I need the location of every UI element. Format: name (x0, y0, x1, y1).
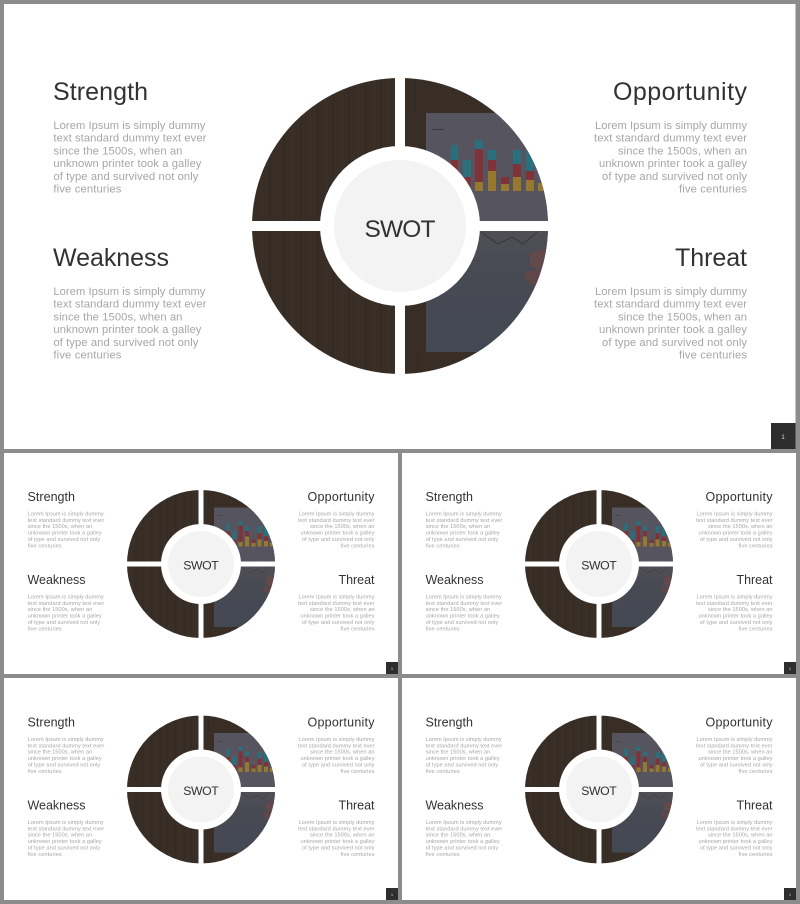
chart: SWOT ring with photo quadrants (522, 486, 676, 641)
label: SWOT centre: SWOT (183, 784, 219, 798)
text block: Threat description: of type and survived not only (700, 620, 773, 626)
text block: Opportunity description: text standard dummy text ever (696, 743, 773, 749)
text block: Threat description: of type and survived not only (602, 337, 747, 349)
text block: Opportunity description: of type and survived not only (700, 762, 773, 768)
text block: Strength description: text standard dummy text ever (426, 743, 502, 749)
text block: Weakness description: unknown printer took a galley (426, 839, 500, 845)
text block: Opportunity description: Lorem Ipsum is simply dummy (696, 737, 773, 743)
text block: Opportunity description: five centuries (340, 769, 375, 775)
text block: Opportunity description: five centuries (340, 543, 375, 549)
text block: Threat description: five centuries (738, 626, 773, 632)
text block: Strength description: five centuries (426, 769, 460, 775)
text block: Weakness description: since the 1500s, when an (426, 607, 490, 613)
text block: Weakness description: Lorem Ipsum is simply dummy (28, 594, 104, 600)
text block: Strength description: text standard dummy text ever (53, 133, 207, 145)
text block: Weakness description: of type and survived not only (426, 620, 498, 626)
text block: Threat description: since the 1500s, when an (310, 607, 374, 613)
label: SWOT centre: SWOT (581, 558, 617, 572)
text block: Weakness description: five centuries (53, 350, 122, 362)
text block: Weakness description: of type and survived not only (28, 620, 100, 626)
panel: small slide bottom left (4, 678, 398, 900)
text block: Opportunity description: of type and survived not only (602, 171, 747, 183)
text block: Opportunity description: since the 1500s, when an (708, 524, 772, 530)
text block: Opportunity description: since the 1500s, when an (618, 145, 747, 157)
text block: Weakness description: of type and survived not only (28, 846, 100, 852)
page number badge: 1 (781, 435, 785, 441)
page number badge: 1 (391, 892, 394, 897)
heading: Opportunity: Opportunity (308, 716, 375, 730)
text block: Weakness description: of type and survived not only (53, 337, 199, 349)
text block: Threat description: unknown printer took a galley (300, 839, 375, 845)
text block: Opportunity description: Lorem Ipsum is simply dummy (595, 120, 747, 132)
text block: Opportunity description: since the 1500s, when an (310, 750, 374, 756)
text block: Threat description: Lorem Ipsum is simply dummy (696, 820, 773, 826)
text block: Threat description: since the 1500s, when an (310, 833, 374, 839)
heading: Opportunity: Opportunity (308, 490, 375, 504)
text block: Weakness description: five centuries (28, 852, 62, 858)
text block: Weakness description: Lorem Ipsum is simply dummy (53, 286, 206, 298)
page number badge (771, 423, 796, 449)
text block: Strength description: unknown printer took a galley (426, 756, 500, 762)
chart: SWOT ring with photo quadrants (124, 486, 278, 641)
heading: Weakness: Weakness (426, 798, 484, 812)
text block: Threat description (594, 286, 747, 362)
text block: Weakness description: five centuries (28, 626, 62, 632)
page number badge (386, 662, 398, 674)
text block: Threat description (298, 820, 375, 858)
text block: Strength description (53, 120, 207, 196)
text block: Strength description: Lorem Ipsum is simply dummy (28, 737, 104, 743)
chart: SWOT ring with photo quadrants (124, 712, 278, 866)
heading: Opportunity: Opportunity (706, 490, 773, 504)
chart: SWOT ring with photo quadrants (245, 70, 555, 380)
text block: Opportunity description: of type and survived not only (700, 537, 773, 543)
text block: Strength description: since the 1500s, when an (426, 750, 490, 756)
text block: Threat description: unknown printer took a galley (599, 324, 747, 336)
label: SWOT centre: SWOT (364, 216, 436, 243)
panel: large SWOT slide (4, 4, 796, 449)
page number badge: 1 (789, 892, 792, 897)
text block: Strength description: Lorem Ipsum is simply dummy (28, 512, 104, 518)
text block: Opportunity description: since the 1500s, when an (310, 524, 374, 530)
text block: Threat description: text standard dummy text ever (298, 601, 375, 607)
text block: Weakness description: since the 1500s, when an (28, 833, 92, 839)
text block: Strength description (426, 512, 502, 549)
label: SWOT centre: SWOT (183, 558, 219, 572)
text block: Strength description: five centuries (426, 543, 460, 549)
text block: Threat description: unknown printer took a galley (698, 839, 773, 845)
text block: Strength description: since the 1500s, when an (426, 524, 490, 530)
text block: Threat description: five centuries (738, 852, 773, 858)
text block: Weakness description (53, 286, 207, 362)
text block: Weakness description: since the 1500s, when an (53, 311, 182, 323)
text block: Strength description: Lorem Ipsum is simply dummy (426, 512, 502, 518)
text block: Weakness description: since the 1500s, when an (426, 833, 490, 839)
text block: Strength description: text standard dummy text ever (28, 518, 104, 524)
text block: Opportunity description: unknown printer took a galley (698, 756, 773, 762)
text block: Threat description: five centuries (340, 626, 375, 632)
text block: Weakness description: five centuries (426, 626, 460, 632)
text block: Strength description: of type and survived not only (426, 537, 498, 543)
text block: Threat description (696, 594, 773, 632)
text block: Strength description: of type and survived not only (426, 762, 498, 768)
text block: Opportunity description (696, 512, 773, 549)
text block: Weakness description: Lorem Ipsum is simply dummy (426, 820, 502, 826)
heading: Threat: Threat (736, 573, 773, 587)
chart: SWOT ring with photo quadrants (522, 712, 676, 866)
text block: Threat description: Lorem Ipsum is simply dummy (696, 594, 773, 600)
text block: Weakness description: unknown printer took a galley (28, 614, 102, 620)
heading: Threat: Threat (675, 244, 747, 272)
text block: Weakness description: since the 1500s, when an (28, 607, 92, 613)
text block: Strength description: five centuries (53, 184, 122, 196)
text block: Threat description: since the 1500s, when an (708, 607, 772, 613)
text block: Opportunity description: five centuries (738, 769, 773, 775)
heading: Strength: Strength (28, 490, 75, 504)
text block: Strength description: five centuries (28, 769, 62, 775)
heading: Weakness: Weakness (28, 798, 86, 812)
text block: Strength description: five centuries (28, 543, 62, 549)
text block: Strength description: since the 1500s, when an (28, 750, 92, 756)
text block: Strength description: text standard dummy text ever (28, 743, 104, 749)
text block: Weakness description: Lorem Ipsum is simply dummy (426, 594, 502, 600)
text block: Weakness description: unknown printer took a galley (426, 614, 500, 620)
text block: Threat description: text standard dummy text ever (298, 826, 375, 832)
page number badge (784, 888, 796, 900)
text block: Strength description: text standard dummy text ever (426, 518, 502, 524)
page number badge (386, 888, 398, 900)
text block: Opportunity description (696, 737, 773, 775)
text block: Opportunity description: unknown printer took a galley (698, 531, 773, 537)
text block: Opportunity description: Lorem Ipsum is simply dummy (298, 737, 375, 743)
text block: Threat description: Lorem Ipsum is simply dummy (595, 286, 747, 298)
text block: Opportunity description: of type and survived not only (302, 762, 375, 768)
text block: Weakness description: text standard dummy text ever (28, 826, 104, 832)
heading: Strength: Strength (53, 78, 148, 106)
text block: Strength description: Lorem Ipsum is simply dummy (53, 120, 206, 132)
text block: Weakness description: text standard dummy text ever (426, 826, 502, 832)
text block: Opportunity description: text standard dummy text ever (594, 133, 747, 145)
text block: Weakness description: unknown printer took a galley (53, 324, 202, 336)
heading: Threat: Threat (338, 798, 375, 812)
text block: Opportunity description: unknown printer took a galley (599, 158, 747, 170)
text block: Opportunity description: text standard dummy text ever (298, 743, 375, 749)
text block: Strength description (426, 737, 502, 775)
text block: Threat description: since the 1500s, when an (618, 311, 747, 323)
text block: Strength description (28, 512, 104, 549)
panel: small slide top right (402, 453, 796, 674)
text block: Opportunity description (594, 120, 747, 196)
heading: Strength: Strength (28, 716, 75, 730)
text block: Opportunity description: five centuries (679, 184, 747, 196)
heading: Threat: Threat (736, 798, 773, 812)
text block: Weakness description (426, 594, 502, 632)
page number badge: 1 (789, 666, 792, 671)
text block: Strength description: unknown printer took a galley (28, 756, 102, 762)
panel: small slide top left (4, 453, 398, 674)
text block: Weakness description: text standard dummy text ever (28, 601, 104, 607)
text block: Threat description: five centuries (679, 350, 747, 362)
text block: Weakness description: text standard dummy text ever (426, 601, 502, 607)
page number badge: 1 (391, 666, 394, 671)
text block: Opportunity description: text standard dummy text ever (696, 518, 773, 524)
text block: Threat description (298, 594, 375, 632)
text block: Threat description: text standard dummy text ever (696, 601, 773, 607)
text block: Strength description: of type and survived not only (53, 171, 199, 183)
text block: Threat description: unknown printer took a galley (300, 614, 375, 620)
text block: Weakness description (28, 594, 104, 632)
text block: Weakness description (28, 820, 104, 858)
text block: Strength description: unknown printer took a galley (53, 158, 202, 170)
text block: Threat description: unknown printer took a galley (698, 614, 773, 620)
text block: Opportunity description: Lorem Ipsum is simply dummy (298, 512, 375, 518)
text block: Weakness description: text standard dummy text ever (53, 299, 207, 311)
text block: Opportunity description: unknown printer took a galley (300, 756, 375, 762)
text block: Weakness description (426, 820, 502, 858)
text block: Threat description: Lorem Ipsum is simply dummy (298, 820, 375, 826)
page number badge (784, 662, 796, 674)
panel: small slide bottom right (402, 678, 796, 900)
text block: Weakness description: unknown printer took a galley (28, 839, 102, 845)
text block: Opportunity description (298, 737, 375, 775)
heading: Strength: Strength (426, 490, 473, 504)
heading: Opportunity: Opportunity (613, 78, 748, 106)
text block: Strength description: unknown printer took a galley (28, 531, 102, 537)
text block: Threat description: of type and survived not only (700, 846, 773, 852)
text block: Opportunity description (298, 512, 375, 549)
text block: Opportunity description: Lorem Ipsum is simply dummy (696, 512, 773, 518)
text block: Weakness description: Lorem Ipsum is simply dummy (28, 820, 104, 826)
text block: Threat description (696, 820, 773, 858)
text block: Opportunity description: text standard dummy text ever (298, 518, 375, 524)
text block: Opportunity description: since the 1500s, when an (708, 750, 772, 756)
text block: Strength description (28, 737, 104, 775)
label: SWOT centre: SWOT (581, 784, 617, 798)
text block: Strength description: since the 1500s, when an (53, 145, 182, 157)
text block: Opportunity description: five centuries (738, 543, 773, 549)
text block: Strength description: of type and survived not only (28, 537, 100, 543)
heading: Opportunity: Opportunity (706, 716, 773, 730)
text block: Strength description: unknown printer took a galley (426, 531, 500, 537)
text block: Threat description: text standard dummy text ever (594, 299, 747, 311)
text block: Threat description: of type and survived not only (302, 846, 375, 852)
text block: Threat description: of type and survived not only (302, 620, 375, 626)
text block: Weakness description: five centuries (426, 852, 460, 858)
text block: Strength description: since the 1500s, when an (28, 524, 92, 530)
heading: Weakness: Weakness (28, 573, 86, 587)
text block: Threat description: Lorem Ipsum is simply dummy (298, 594, 375, 600)
text block: Opportunity description: unknown printer took a galley (300, 531, 375, 537)
text block: Opportunity description: of type and survived not only (302, 537, 375, 543)
heading: Weakness: Weakness (53, 244, 169, 272)
text block: Weakness description: of type and survived not only (426, 846, 498, 852)
text block: Threat description: text standard dummy text ever (696, 826, 773, 832)
heading: Threat: Threat (338, 573, 375, 587)
text block: Threat description: since the 1500s, when an (708, 833, 772, 839)
heading: Strength: Strength (426, 716, 473, 730)
text block: Strength description: of type and survived not only (28, 762, 100, 768)
heading: Weakness: Weakness (426, 573, 484, 587)
text block: Threat description: five centuries (340, 852, 375, 858)
text block: Strength description: Lorem Ipsum is simply dummy (426, 737, 502, 743)
